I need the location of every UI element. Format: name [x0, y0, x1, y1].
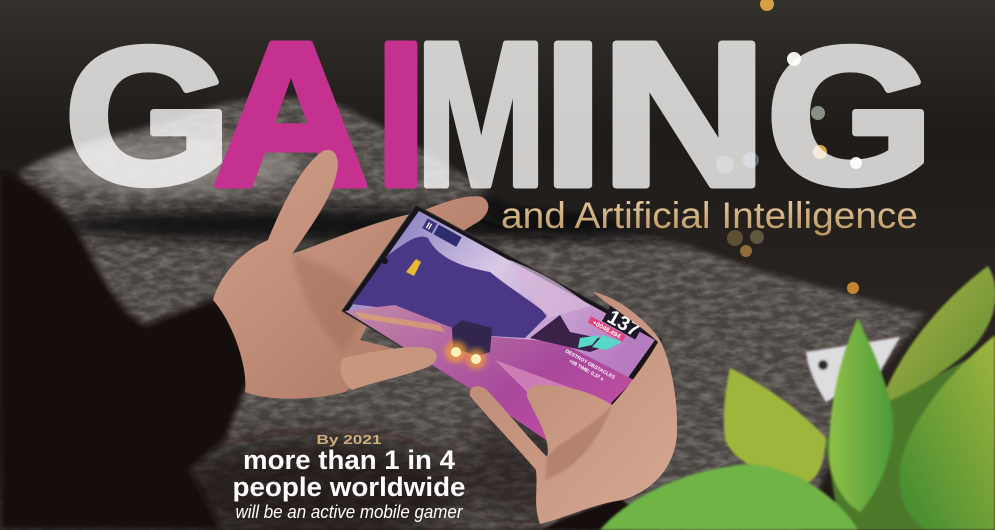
left leaf — [724, 368, 826, 484]
right hand and sleeve — [470, 292, 677, 530]
left hand lower fingers — [340, 347, 437, 390]
points value: +0048.494 — [591, 319, 622, 341]
letter I (magenta): I — [375, 0, 427, 229]
road — [345, 305, 634, 470]
subtitle: and Artificial Intelligence — [501, 195, 918, 236]
pause button and status — [422, 218, 462, 247]
more than 1 in 4: more than 1 in 4 — [243, 445, 455, 475]
By 2021: By 2021 — [316, 433, 382, 447]
upper right leaf — [880, 266, 995, 405]
left hand — [213, 150, 488, 399]
purple mountains — [352, 237, 548, 338]
bonus text — [561, 349, 616, 387]
score number: 137 — [603, 306, 643, 342]
phone body — [806, 337, 900, 402]
will be an active mobile gamer: will be an active mobile gamer — [236, 502, 463, 522]
right large leaf — [900, 335, 995, 530]
dark sleeve — [542, 498, 660, 530]
time label: +08 TIME: 0.37 s — [568, 359, 605, 383]
hand with fingers — [470, 292, 677, 524]
title: GAMING — [64, 0, 934, 229]
centre leaf — [829, 318, 893, 512]
game screen sky — [348, 211, 655, 400]
person silhouette and left sleeve — [0, 172, 252, 530]
background bokeh lights — [716, 0, 862, 294]
racing car — [452, 320, 492, 356]
score badge — [587, 299, 644, 347]
plant leaves — [600, 266, 995, 530]
letter G: G — [64, 7, 232, 225]
people worldwide: people worldwide — [232, 472, 466, 502]
letter N: N — [601, 0, 767, 229]
direction chevrons — [578, 335, 622, 350]
obstacles label: DESTROY OBSTACLES — [564, 349, 616, 381]
score panel — [602, 305, 644, 340]
letter I: I — [543, 0, 603, 229]
letter A (magenta): A — [213, 0, 369, 229]
phone body — [342, 205, 662, 470]
road streaks — [495, 360, 590, 425]
letter M: M — [416, 0, 546, 229]
bottom leaf — [600, 464, 858, 530]
headlights — [445, 341, 486, 369]
camera lens — [818, 360, 828, 370]
letter G: G — [766, 7, 934, 225]
pause label: II — [424, 220, 434, 232]
points badge — [588, 316, 626, 342]
front camera — [382, 258, 388, 264]
fur blanket — [0, 95, 926, 530]
pause icon — [422, 218, 437, 233]
caption: mobile gamer statistic — [232, 433, 466, 522]
white phone on blanket — [806, 337, 900, 402]
status panel — [434, 225, 462, 247]
rear foliage — [825, 345, 995, 530]
game character — [406, 259, 421, 276]
obstacle silhouette — [530, 315, 618, 352]
smartphone with racing game — [342, 205, 662, 470]
knuckle shading — [545, 405, 612, 480]
